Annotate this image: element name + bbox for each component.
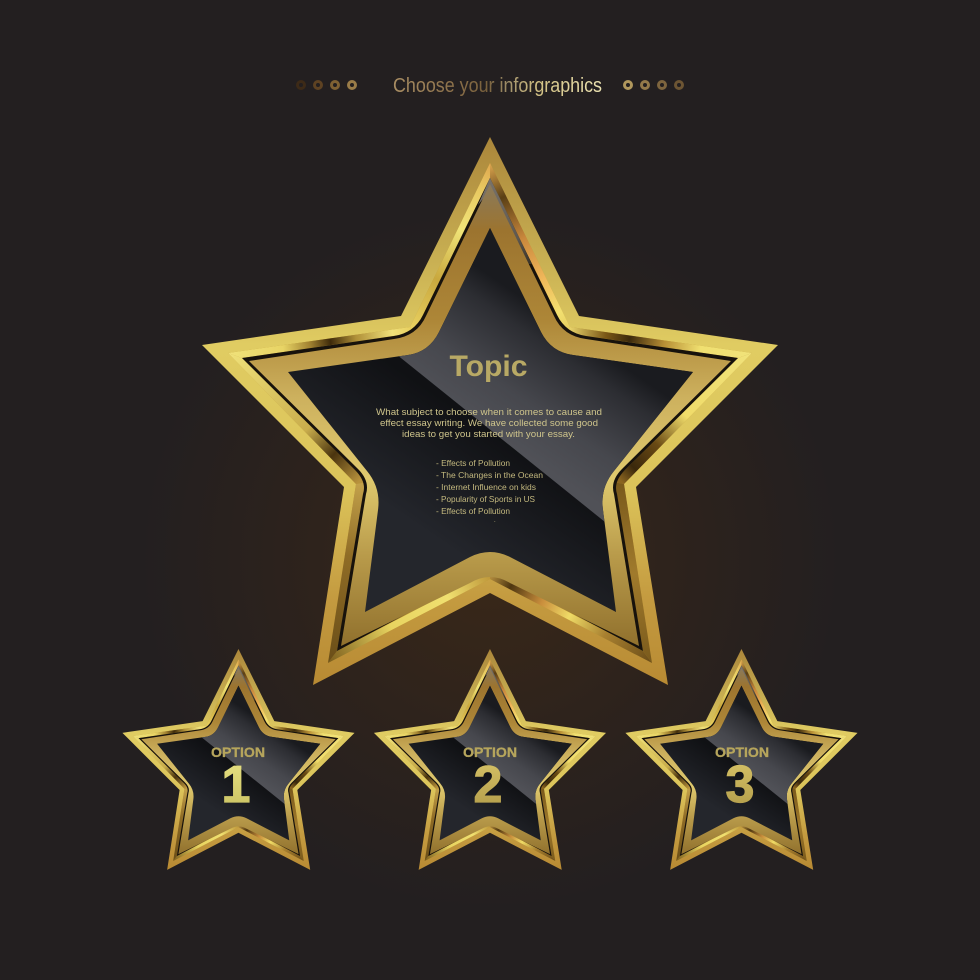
option 3 frame	[625, 649, 858, 870]
panel: option 1 star	[122, 649, 355, 870]
header row	[298, 75, 682, 97]
topic list: - Popularity of Sports in US	[436, 494, 535, 504]
option 2 number: 2	[474, 756, 502, 814]
panel: main topic star	[202, 137, 778, 685]
right dot row	[624, 82, 682, 88]
topic description: effect essay writing. We have collected some good	[380, 418, 598, 429]
topic list: - The Changes in the Ocean	[436, 470, 543, 480]
topic list: - Effects of Pollution	[436, 458, 510, 468]
topic heading: Topic	[450, 350, 528, 383]
option 1 frame	[122, 649, 355, 870]
left dot row	[298, 82, 356, 88]
topic list: .	[494, 518, 496, 524]
heading: Choose your inforgraphics	[393, 75, 602, 97]
topic description: What subject to choose when it comes to cause and	[376, 407, 602, 418]
option 3 label: OPTION	[715, 744, 769, 760]
topic description	[376, 407, 602, 440]
option 2 frame	[374, 649, 606, 870]
panel: option 2 star	[374, 649, 606, 870]
option 2 label: OPTION	[463, 744, 517, 760]
option 3 number: 3	[726, 756, 754, 814]
topic list: - Effects of Pollution	[436, 506, 510, 516]
panel: option 3 star	[625, 649, 858, 870]
topic list	[436, 458, 543, 524]
star frame	[202, 137, 778, 685]
option 1 label: OPTION	[211, 744, 265, 760]
topic description: ideas to get you started with your essay.	[402, 429, 575, 440]
topic list: - Internet Influence on kids	[436, 482, 536, 492]
option 1 number: 1	[222, 756, 250, 814]
